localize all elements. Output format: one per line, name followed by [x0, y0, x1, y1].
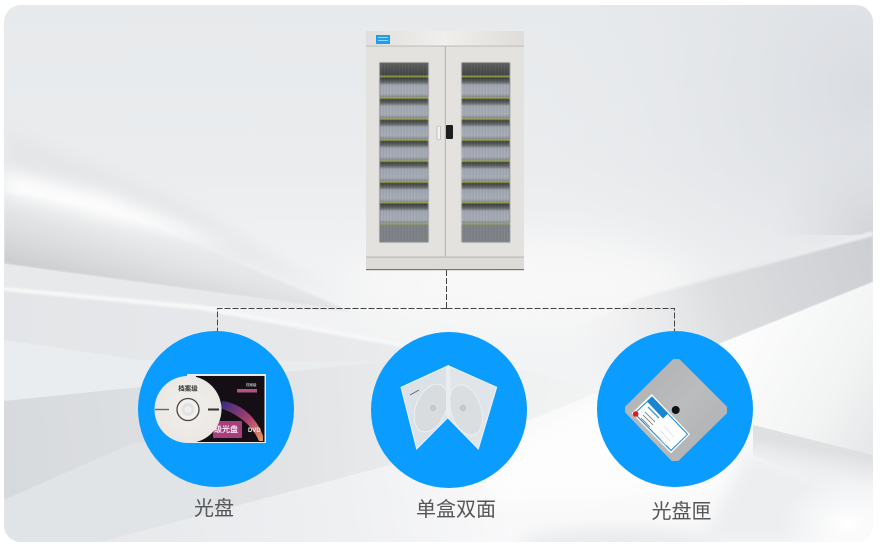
label: double-sided case: 单盒双面: [416, 498, 496, 521]
disc: [154, 376, 222, 443]
sleeve body: [625, 359, 727, 461]
cabinet base: [366, 256, 524, 270]
dvd box: DVD: [248, 428, 261, 434]
dvd box: 级光盘: [214, 424, 238, 434]
dvd box: 档案级: [246, 382, 257, 387]
label: disc: 光盘: [194, 497, 234, 520]
left window: [379, 62, 429, 243]
disc: 档案级: [178, 384, 198, 392]
cabinet top band: [366, 31, 524, 46]
circle: sleeve background: [597, 331, 753, 487]
circle: case background: [371, 332, 527, 488]
cabinet door body: [366, 46, 524, 257]
item: disc sleeve: [597, 331, 753, 523]
cabinet display label: [376, 35, 390, 44]
item: disc: [138, 331, 294, 520]
door handle: [437, 126, 440, 140]
item: double-sided case: [371, 332, 527, 521]
door lock: [446, 125, 453, 139]
sleeve hole: [672, 406, 680, 414]
sleeve label: [632, 394, 690, 453]
cabinet: [366, 31, 524, 270]
dvd box: [187, 374, 266, 443]
connector: dashed lines: [218, 270, 674, 332]
circle: disc background: [138, 331, 294, 487]
open double case: [401, 366, 497, 449]
label: disc sleeve: 光盘匣: [652, 500, 712, 523]
right window: [461, 62, 510, 243]
